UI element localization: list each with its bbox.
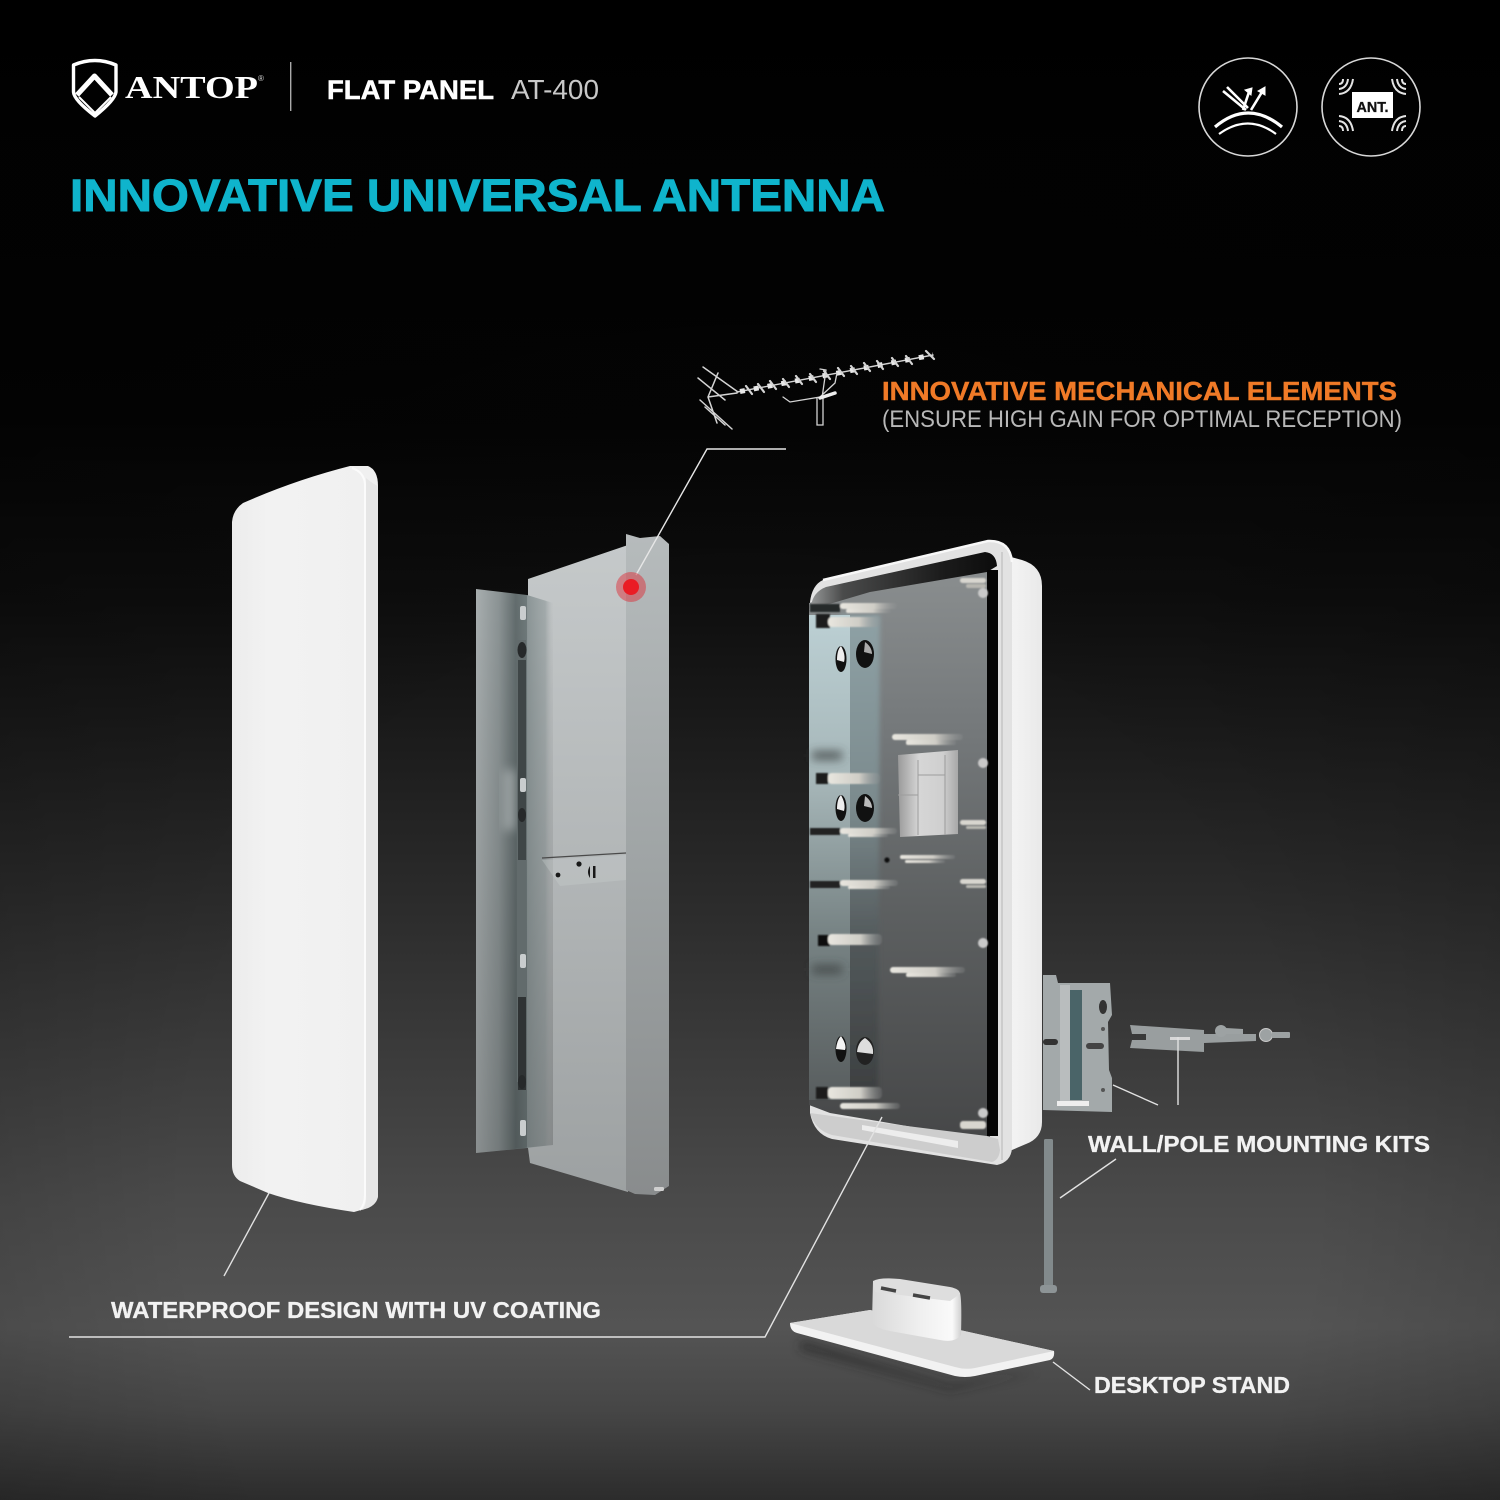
stand base <box>790 1310 1054 1377</box>
interior mid wall <box>840 615 880 1090</box>
reflector flap <box>476 589 553 1153</box>
label: desktop stand: DESKTOP STAND <box>1094 1372 1290 1398</box>
product name: FLAT PANEL <box>327 75 494 105</box>
icon: antenna signal: ANT. <box>1356 99 1388 116</box>
red marker <box>616 572 646 602</box>
cover side edge <box>362 478 378 1210</box>
leader: reflector hot spot <box>636 449 786 575</box>
logo: ANTOP <box>74 60 264 116</box>
leader: radome <box>224 1193 269 1276</box>
support pins <box>810 578 988 1129</box>
interior back wall <box>809 560 990 1140</box>
flap slot <box>517 640 526 1090</box>
reflector notch <box>542 853 626 858</box>
bottom clip <box>654 1187 664 1191</box>
flap rivets <box>518 642 526 1089</box>
antenna illustration <box>698 351 934 429</box>
wall shadows <box>812 752 842 973</box>
hanger and bolts <box>1130 1025 1290 1052</box>
stand shadow <box>800 1340 1040 1390</box>
desktop stand <box>790 1278 1054 1390</box>
icon: shield <box>74 60 116 116</box>
icon: signal reflection <box>1199 58 1297 156</box>
label: wall pole mounting kits: WALL/POLE MOUNTING KITS <box>1088 1131 1430 1157</box>
registered mark: ® <box>258 74 264 83</box>
reflector side strip <box>626 534 669 1195</box>
icon: antenna signal <box>1322 58 1420 156</box>
stand neck <box>872 1281 961 1341</box>
pole rod <box>1040 1139 1057 1293</box>
wall bracket <box>1043 975 1112 1112</box>
leader: stand <box>1053 1362 1090 1390</box>
leader: rod <box>1060 1159 1116 1198</box>
callout heading: INNOVATIVE MECHANICAL ELEMENTS <box>882 378 1397 406</box>
cover body <box>232 466 378 1212</box>
white outer body <box>1000 554 1042 1153</box>
panel: open enclosure back <box>809 541 1042 1165</box>
callout: innovative mechanical elements <box>882 378 1402 433</box>
mounting holes <box>836 640 874 1065</box>
interior top band <box>809 552 997 610</box>
brand name: ANTOP <box>125 69 258 105</box>
leader: bracket <box>1113 1085 1158 1105</box>
reflector face <box>528 545 628 1192</box>
callout subtext: (ENSURE HIGH GAIN FOR OPTIMAL RECEPTION) <box>882 406 1402 433</box>
leader: hanger <box>1177 1037 1179 1105</box>
lower tray <box>810 1113 1000 1162</box>
title: INNOVATIVE UNIVERSAL ANTENNA <box>70 170 885 221</box>
panel: white radome cover <box>232 466 378 1212</box>
leader: enclosure <box>69 1117 882 1337</box>
panel: metal reflector <box>476 534 669 1195</box>
interior left wall <box>809 615 850 1100</box>
label: waterproof design: WATERPROOF DESIGN WITH UV COATING <box>111 1297 601 1323</box>
black inner edge <box>987 570 998 1136</box>
header divider <box>290 62 291 111</box>
rim <box>810 541 1012 1165</box>
amplifier module <box>898 750 958 837</box>
model number: AT-400 <box>511 74 599 105</box>
